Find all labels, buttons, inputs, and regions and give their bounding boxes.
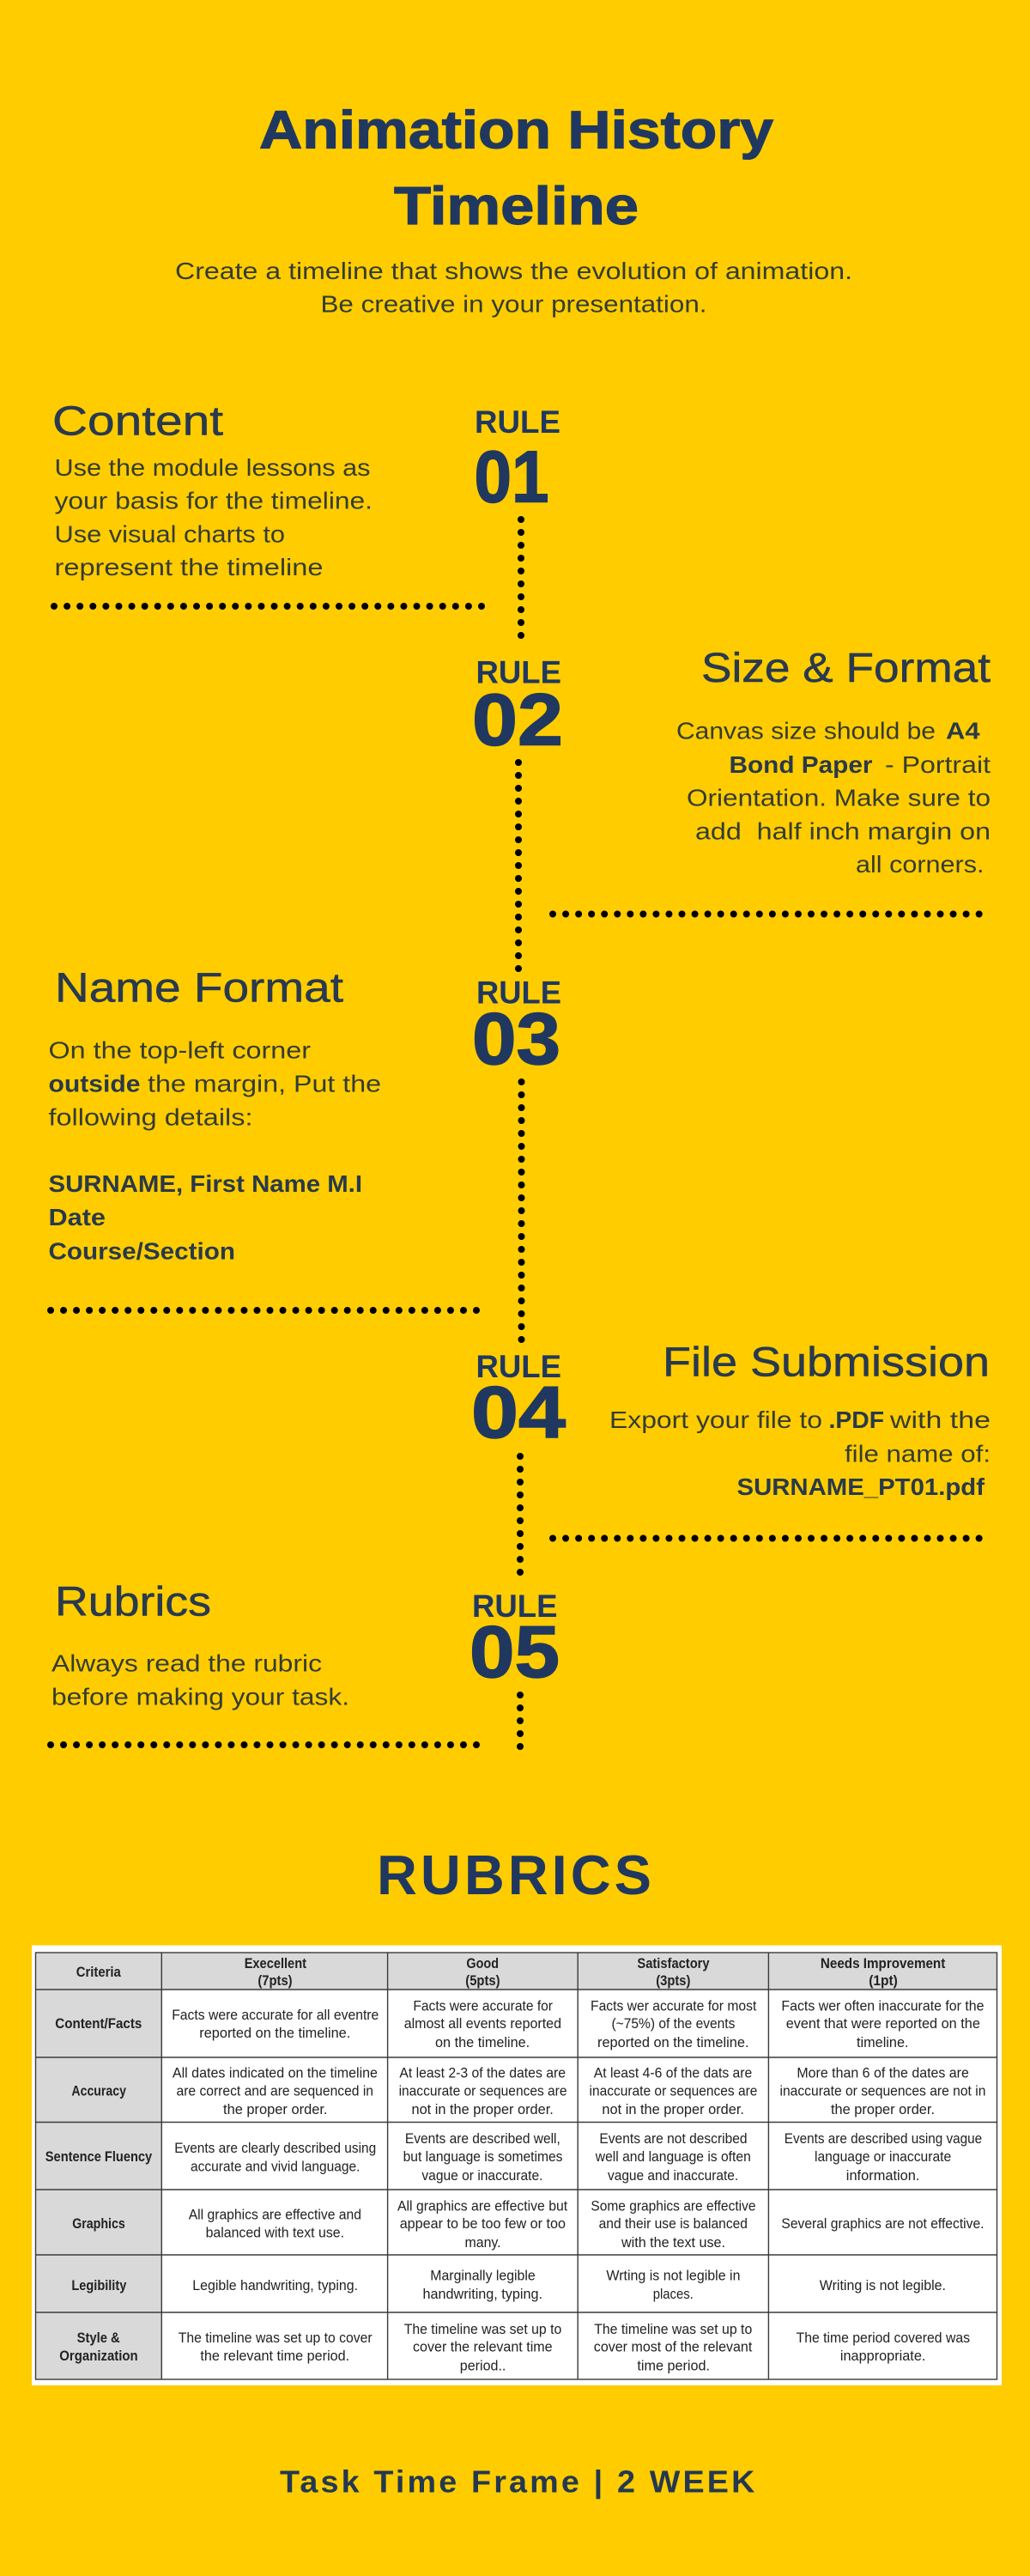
text: name format body: the margin, Put the	[148, 1070, 381, 1097]
table row: sentence fluency: but language is sometimes	[403, 2149, 563, 2165]
table row: legibility: places.	[653, 2287, 694, 2302]
table row: legibility: Writing is not legible.	[820, 2278, 946, 2293]
text: name format body: Date	[48, 1204, 106, 1230]
table row: content/facts: almost all events reported	[404, 2016, 561, 2032]
table row: style and organization: Organization	[59, 2348, 138, 2364]
subtitle: Create a timeline that shows the evolution of animation.	[175, 258, 852, 284]
title: Timeline	[394, 177, 639, 236]
table row: content/facts: event that were reported on the	[786, 2016, 980, 2032]
rule number 02: RULE	[476, 654, 561, 690]
table row: style and organization: time period.	[637, 2358, 710, 2373]
table row: graphics: Some graphics are effective	[591, 2198, 755, 2214]
text: content body: Use the module lessons as	[55, 454, 371, 481]
table row: graphics: appear to be too few or too	[400, 2216, 566, 2232]
timeline dotted connector segments	[518, 519, 522, 1748]
table row: style and organization: Style &	[77, 2330, 120, 2346]
panel: rule 04 file submission	[471, 1340, 991, 1539]
table row: accuracy: All dates indicated on the timeline	[173, 2066, 378, 2081]
table grid lines	[36, 1953, 997, 2379]
rule number 01	[474, 404, 560, 519]
table row: legibility	[71, 2269, 946, 2302]
rule number 04	[471, 1349, 566, 1454]
table row: accuracy: are correct and are sequenced in	[177, 2083, 373, 2099]
panel: rule 02 size and format	[472, 646, 991, 914]
table row: style and organization: The timeline was set up to	[404, 2322, 561, 2337]
table row: accuracy: Accuracy	[71, 2083, 127, 2099]
table row: graphics: Several graphics are not effective.	[781, 2216, 984, 2232]
table row: sentence fluency: Events are not described	[599, 2131, 748, 2147]
dotted divider	[553, 910, 980, 917]
table row: accuracy: the proper order.	[831, 2102, 935, 2117]
table row: sentence fluency: accurate and vivid language.	[191, 2159, 360, 2174]
table row: accuracy	[71, 2066, 985, 2117]
table header row: (3pts)	[656, 1973, 690, 1989]
text: rubrics body: Always read the rubric	[52, 1650, 322, 1676]
table white background	[32, 1946, 1002, 2385]
table row: sentence fluency: Events are described using vague	[785, 2131, 982, 2147]
text: file submission body	[609, 1406, 991, 1500]
rule number 03: 03	[472, 999, 560, 1080]
table row: graphics: All graphics are effective and	[189, 2207, 361, 2222]
text: file submission body: SURNAME_PT01.pdf	[736, 1473, 985, 1500]
table row: accuracy: At least 4-6 of the dats are	[594, 2066, 752, 2081]
table row: content/facts: reported on the timeline.	[597, 2035, 748, 2050]
subtitle	[175, 258, 852, 318]
table row: style and organization: the relevant time period.	[200, 2348, 349, 2364]
table row: sentence fluency: Events are described well,	[405, 2131, 560, 2147]
table row: style and organization	[59, 2322, 970, 2373]
text: content body	[55, 454, 373, 580]
text: rubrics body: before making your task.	[52, 1683, 349, 1710]
text: content body: represent the timeline	[55, 554, 323, 580]
table row: accuracy: More than 6 of the dates are	[797, 2066, 969, 2081]
table header row: (1pt)	[869, 1973, 898, 1989]
table row: accuracy: not in the proper order.	[602, 2102, 744, 2117]
table row: style and organization: The time period covered was	[797, 2330, 970, 2346]
rule number 05: 05	[470, 1612, 560, 1693]
table row: style and organization: cover most of the relevant	[594, 2339, 753, 2354]
heading: rubrics section: RUBRICS	[377, 1844, 655, 1906]
table row: graphics: and their use is balanced	[599, 2216, 748, 2232]
table row: sentence fluency: language or inaccurate	[815, 2149, 951, 2165]
table row: content/facts: Facts wer often inaccurate for the	[781, 1999, 984, 2014]
text: size and format body	[676, 718, 991, 878]
panel: rule 01 content	[52, 398, 560, 606]
table row: sentence fluency	[45, 2131, 982, 2184]
rule number 04: RULE	[476, 1349, 561, 1384]
table row: style and organization: The timeline was set up to cover	[179, 2330, 373, 2346]
table row: content/facts: timeline.	[857, 2035, 908, 2050]
table header row: (7pts)	[258, 1973, 293, 1989]
heading: size and format: Size & Format	[701, 646, 991, 691]
text: name format body: On the top-left corner	[48, 1037, 311, 1063]
text: size and format body: - Portrait	[885, 751, 991, 778]
table header row: Needs Improvement	[821, 1956, 946, 1971]
table row: graphics	[72, 2198, 985, 2251]
table row: sentence fluency: Events are clearly described using	[174, 2141, 376, 2156]
text: size and format body: A4	[946, 718, 980, 744]
heading: content: Content	[52, 398, 223, 445]
table row: legibility: Wrting is not legible in	[606, 2269, 740, 2284]
table header row: Good	[466, 1956, 499, 1971]
table row: accuracy: At least 2-3 of the dates are	[399, 2066, 566, 2081]
text: file submission body: with the	[889, 1406, 991, 1433]
table row: legibility: Marginally legible	[430, 2269, 536, 2284]
table row: accuracy: inaccurate or sequences are	[399, 2083, 566, 2099]
table row: content/facts: Facts were accurate for	[413, 1999, 553, 2014]
heading: rubrics: Rubrics	[55, 1580, 211, 1625]
text: file submission body: file name of:	[845, 1441, 991, 1467]
rule number 05: RULE	[472, 1589, 558, 1624]
table row: graphics: All graphics are effective but	[397, 2198, 568, 2214]
text: size and format body: Orientation. Make sure to	[687, 785, 991, 811]
table row: graphics: many.	[465, 2235, 501, 2251]
table row: legibility: Legible handwriting, typing.	[192, 2278, 358, 2293]
table row: accuracy: not in the proper order.	[412, 2102, 554, 2117]
heading: name format: Name Format	[55, 965, 343, 1012]
title: Animation History	[259, 101, 774, 160]
subtitle: Be creative in your presentation.	[321, 290, 707, 318]
table row: accuracy: inaccurate or sequences are	[589, 2083, 757, 2099]
table header row	[76, 1956, 946, 1989]
table row: sentence fluency: well and language is often	[595, 2149, 751, 2165]
text: name format body: Course/Section	[48, 1238, 235, 1264]
table row: sentence fluency: vague or inaccurate.	[421, 2168, 542, 2184]
table header row: Criteria	[76, 1965, 122, 1980]
table row: legibility: handwriting, typing.	[422, 2287, 542, 2302]
table row: graphics: balanced with text use.	[206, 2226, 344, 2241]
text: file submission body: Export your file to	[609, 1406, 822, 1433]
table header row: (5pts)	[465, 1973, 500, 1989]
rule number 01: RULE	[475, 404, 560, 440]
table row: style and organization: inappropriate.	[840, 2348, 925, 2364]
title	[259, 101, 774, 236]
table row: sentence fluency: information.	[846, 2168, 920, 2184]
table row: content/facts: Facts wer accurate for most	[591, 1999, 757, 2014]
table row: content/facts: reported on the timeline.	[199, 2026, 350, 2041]
text: name format body: following details:	[48, 1104, 252, 1130]
table row: legibility: Legibility	[71, 2278, 127, 2293]
table row: content/facts: on the timeline.	[435, 2035, 530, 2050]
table row: style and organization: period..	[460, 2358, 506, 2373]
table row: content/facts: Facts were accurate for all eventre	[172, 2008, 379, 2023]
table header shading	[36, 1953, 997, 2379]
dotted divider	[54, 603, 482, 610]
dotted divider	[51, 1307, 478, 1314]
dotted divider	[553, 1535, 980, 1542]
table row: graphics: Graphics	[72, 2216, 125, 2232]
footer: task time frame: Task Time Frame | 2 WEEK	[280, 2464, 757, 2500]
text: size and format body: add half inch margin on	[695, 817, 991, 845]
table row: style and organization: The timeline was set up to	[594, 2322, 752, 2337]
table row: content/facts	[55, 1999, 984, 2050]
text: name format body: SURNAME, First Name M.I	[48, 1170, 362, 1197]
heading: file submission: File Submission	[663, 1340, 990, 1386]
rule number 03: RULE	[476, 975, 561, 1010]
table row: style and organization: cover the relevant time	[413, 2339, 553, 2354]
dotted divider	[51, 1741, 478, 1748]
text: size and format body: Bond Paper	[730, 751, 873, 778]
table row: accuracy: inaccurate or sequences are not in	[779, 2083, 985, 2099]
text: name format body: outside	[48, 1070, 141, 1097]
table header row: Execellent	[245, 1956, 306, 1971]
text: rubrics body	[52, 1650, 349, 1710]
rule number 04: 04	[471, 1372, 566, 1454]
table row: sentence fluency: vague and inaccurate.	[608, 2168, 738, 2184]
text: name format body	[48, 1037, 381, 1264]
rule number 02	[472, 654, 563, 761]
table row: content/facts: (~75%) of the events	[611, 2016, 735, 2032]
text: content body: Use visual charts to	[55, 520, 285, 548]
text: content body: your basis for the timeline.	[55, 488, 373, 513]
text: file submission body: .PDF	[829, 1406, 884, 1433]
table row: sentence fluency: Sentence Fluency	[45, 2149, 153, 2165]
rubric table	[32, 1946, 1002, 2385]
table row: content/facts: Content/Facts	[55, 2016, 142, 2032]
text: size and format body: Canvas size should be	[676, 718, 936, 744]
panel: rule 03 name format	[48, 965, 561, 1310]
rule number 02: 02	[472, 680, 563, 761]
table row: graphics: with the text use.	[621, 2235, 725, 2251]
table row: accuracy: the proper order.	[223, 2102, 328, 2117]
panel: rule 05 rubrics	[51, 1580, 560, 1745]
table header row: Satisfactory	[637, 1956, 710, 1971]
rule number 01: 01	[474, 436, 549, 519]
text: size and format body: all corners.	[856, 851, 984, 878]
